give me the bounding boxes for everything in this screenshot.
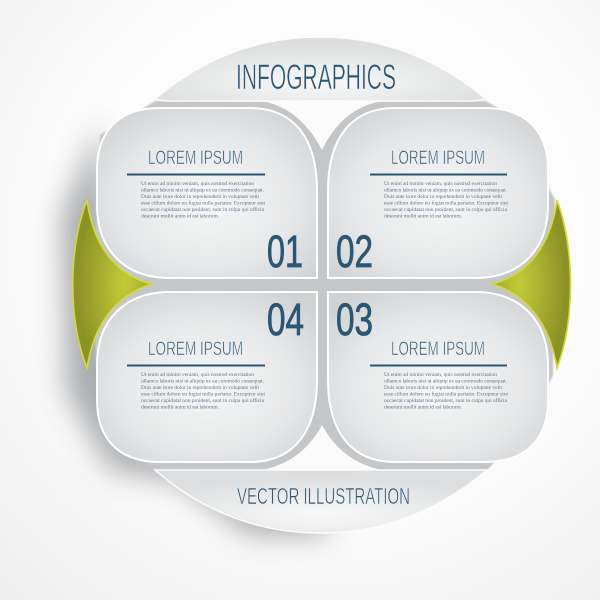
heading: LOREM IPSUM xyxy=(148,339,243,360)
body text: esse cillum dolore eu fugiat nulla pariatur. Excepteur sint xyxy=(384,390,508,398)
body text: Ut enim ad minim veniam, quis nostrud exercitation xyxy=(141,181,254,187)
body text: deserunt mollit anim id est laborum. xyxy=(384,404,463,410)
bottom banner xyxy=(155,470,487,533)
subtitle: VECTOR ILLUSTRATION xyxy=(237,483,410,509)
body text: Duis aute irure dolor in reprehenderit in voluptate velit xyxy=(384,194,502,200)
top banner xyxy=(155,37,486,101)
body text: deserunt mollit anim id est laborum. xyxy=(141,214,220,220)
rule xyxy=(370,364,507,366)
left green arrow xyxy=(73,200,152,368)
heading: LOREM IPSUM xyxy=(148,148,243,169)
rule xyxy=(127,364,265,366)
right green arrow xyxy=(492,200,570,368)
body text: Duis aute irure dolor in reprehenderit in voluptate velit xyxy=(141,385,259,391)
number: 02 xyxy=(336,226,373,277)
body text: Ut enim ad minim veniam, quis nostrud exercitation xyxy=(384,181,497,187)
rule xyxy=(127,174,265,176)
number: 03 xyxy=(336,294,373,345)
body text: occaecat cupidatat non proident, sunt in culpa qui officia xyxy=(384,397,508,404)
body text: ullamco laboris nisi ut aliquip ex ea commodo consequat. xyxy=(141,188,265,194)
body text: Duis aute irure dolor in reprehenderit in voluptate velit xyxy=(384,385,502,391)
drop shadow xyxy=(62,125,330,535)
body text: Ut enim ad minim veniam, quis nostrud exercitation xyxy=(384,372,497,378)
central gray base xyxy=(92,101,555,470)
body text: occaecat cupidatat non proident, sunt in culpa qui officia xyxy=(141,397,265,404)
body text: ullamco laboris nisi ut aliquip ex ea commodo consequat. xyxy=(384,378,508,384)
body text: esse cillum dolore eu fugiat nulla pariatur. Excepteur sint xyxy=(141,200,265,206)
panel 03 xyxy=(328,292,548,462)
heading: LOREM IPSUM xyxy=(391,148,485,169)
title: INFOGRAPHICS xyxy=(236,58,396,97)
panel 04 xyxy=(97,292,317,462)
body text: deserunt mollit anim id est laborum. xyxy=(141,404,220,410)
number: 04 xyxy=(267,294,304,345)
body text: esse cillum dolore eu fugiat nulla pariatur. Excepteur sint xyxy=(384,200,508,206)
body text: Duis aute irure dolor in reprehenderit in voluptate velit xyxy=(141,194,259,200)
body text: ullamco laboris nisi ut aliquip ex ea commodo consequat. xyxy=(141,378,265,384)
heading: LOREM IPSUM xyxy=(391,339,485,360)
body text: occaecat cupidatat non proident, sunt in culpa qui officia xyxy=(384,206,508,213)
center white gap xyxy=(262,101,382,150)
number: 01 xyxy=(267,226,303,277)
panel 01 xyxy=(97,108,317,278)
rule xyxy=(370,174,507,176)
body text: occaecat cupidatat non proident, sunt in culpa qui officia xyxy=(141,206,265,213)
body text: deserunt mollit anim id est laborum. xyxy=(384,214,463,220)
body text: ullamco laboris nisi ut aliquip ex ea commodo consequat. xyxy=(384,188,508,194)
panel 02 xyxy=(328,108,548,278)
body text: Ut enim ad minim veniam, quis nostrud exercitation xyxy=(141,372,254,378)
body text: esse cillum dolore eu fugiat nulla pariatur. Excepteur sint xyxy=(141,390,265,398)
